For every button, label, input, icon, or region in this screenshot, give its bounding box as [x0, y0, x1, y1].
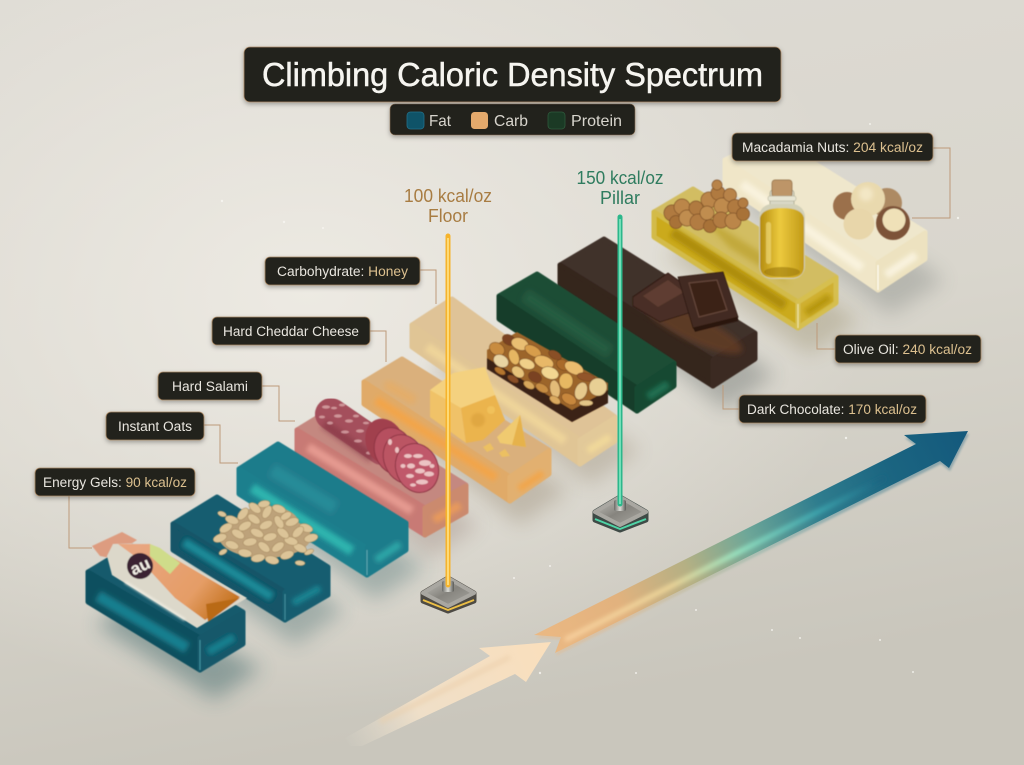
label: instant oats: Instant Oats	[118, 419, 192, 434]
food: rolled oats	[212, 500, 319, 566]
label: hard cheddar cheese: Hard Cheddar Cheese	[223, 324, 359, 339]
pillar label: 150 kcal/oz Pillar	[576, 168, 664, 208]
label: macadamia nuts: Macadamia Nuts: 204 kcal/oz	[742, 140, 923, 155]
label: dark chocolate: Dark Chocolate: 170 kcal/oz	[747, 402, 917, 417]
bar: hard cheddar cheese	[364, 359, 549, 501]
food: energy gel packet	[92, 532, 247, 628]
food: macadamia nuts	[833, 182, 910, 240]
food: hard salami	[319, 404, 446, 499]
label: dark chocolate	[723, 385, 926, 423]
pillar label: 100 kcal/oz Floor: 100 kcal/oz	[404, 186, 492, 206]
food: dark chocolate squares	[633, 272, 748, 363]
bar: hard salami	[297, 405, 466, 535]
bar: energy gels	[88, 546, 243, 670]
arrow: progression large gradient	[534, 431, 969, 656]
legend swatch: fat	[407, 112, 424, 129]
title	[244, 47, 781, 102]
label: macadamia nuts	[732, 133, 950, 218]
pillar label: 150 kcal/oz Pillar: Pillar	[600, 188, 640, 208]
legend swatch: protein	[548, 112, 565, 129]
food: olive oil bottle	[759, 180, 805, 279]
label: energy gels	[35, 468, 195, 548]
label: hard salami	[158, 372, 295, 421]
label: instant oats	[106, 412, 238, 463]
pillar label: 150 kcal/oz Pillar: 150 kcal/oz	[576, 168, 664, 188]
food: cheddar cheese	[430, 367, 526, 457]
food: energy gel packet: au	[127, 554, 153, 579]
bar: protein green	[499, 274, 674, 411]
bar: teal instant oats rear	[239, 444, 406, 575]
legend text: fat: Fat	[429, 113, 452, 130]
label: olive oil: Olive Oil: 240 kcal/oz	[843, 342, 972, 357]
legend swatch: carb	[471, 112, 488, 129]
pillar base: orange	[423, 578, 474, 611]
label: hard cheddar cheese	[212, 317, 386, 362]
pillar label: 100 kcal/oz Floor	[404, 186, 492, 226]
title: Climbing Caloric Density Spectrum	[262, 56, 763, 93]
bar: teal instant oats	[173, 497, 328, 620]
label: energy gels: Energy Gels: 90 kcal/oz	[43, 475, 187, 490]
legend text: protein: Protein	[571, 113, 622, 130]
legend	[390, 104, 635, 135]
pillar label: 100 kcal/oz Floor: Floor	[428, 206, 468, 226]
food: walnuts	[664, 180, 750, 232]
pillar base: green	[595, 497, 646, 530]
label: hard salami: Hard Salami	[172, 379, 248, 394]
bar: dark chocolate	[560, 239, 755, 386]
food: nut bar	[487, 332, 608, 422]
arrow: progression small cream	[345, 642, 551, 746]
label: carbohydrate honey: Carbohydrate: Honey	[277, 264, 408, 279]
pillar: 100 kcal/oz floor	[423, 236, 474, 611]
block shadows	[96, 175, 945, 700]
legend text: carb: Carb	[494, 113, 528, 130]
bar: honey	[412, 299, 615, 464]
label: carbohydrate honey	[265, 257, 436, 304]
bar: olive oil	[654, 189, 836, 328]
bar: macadamia nuts	[725, 137, 925, 290]
pillar: 150 kcal/oz	[595, 217, 646, 530]
label: olive oil	[817, 323, 981, 363]
